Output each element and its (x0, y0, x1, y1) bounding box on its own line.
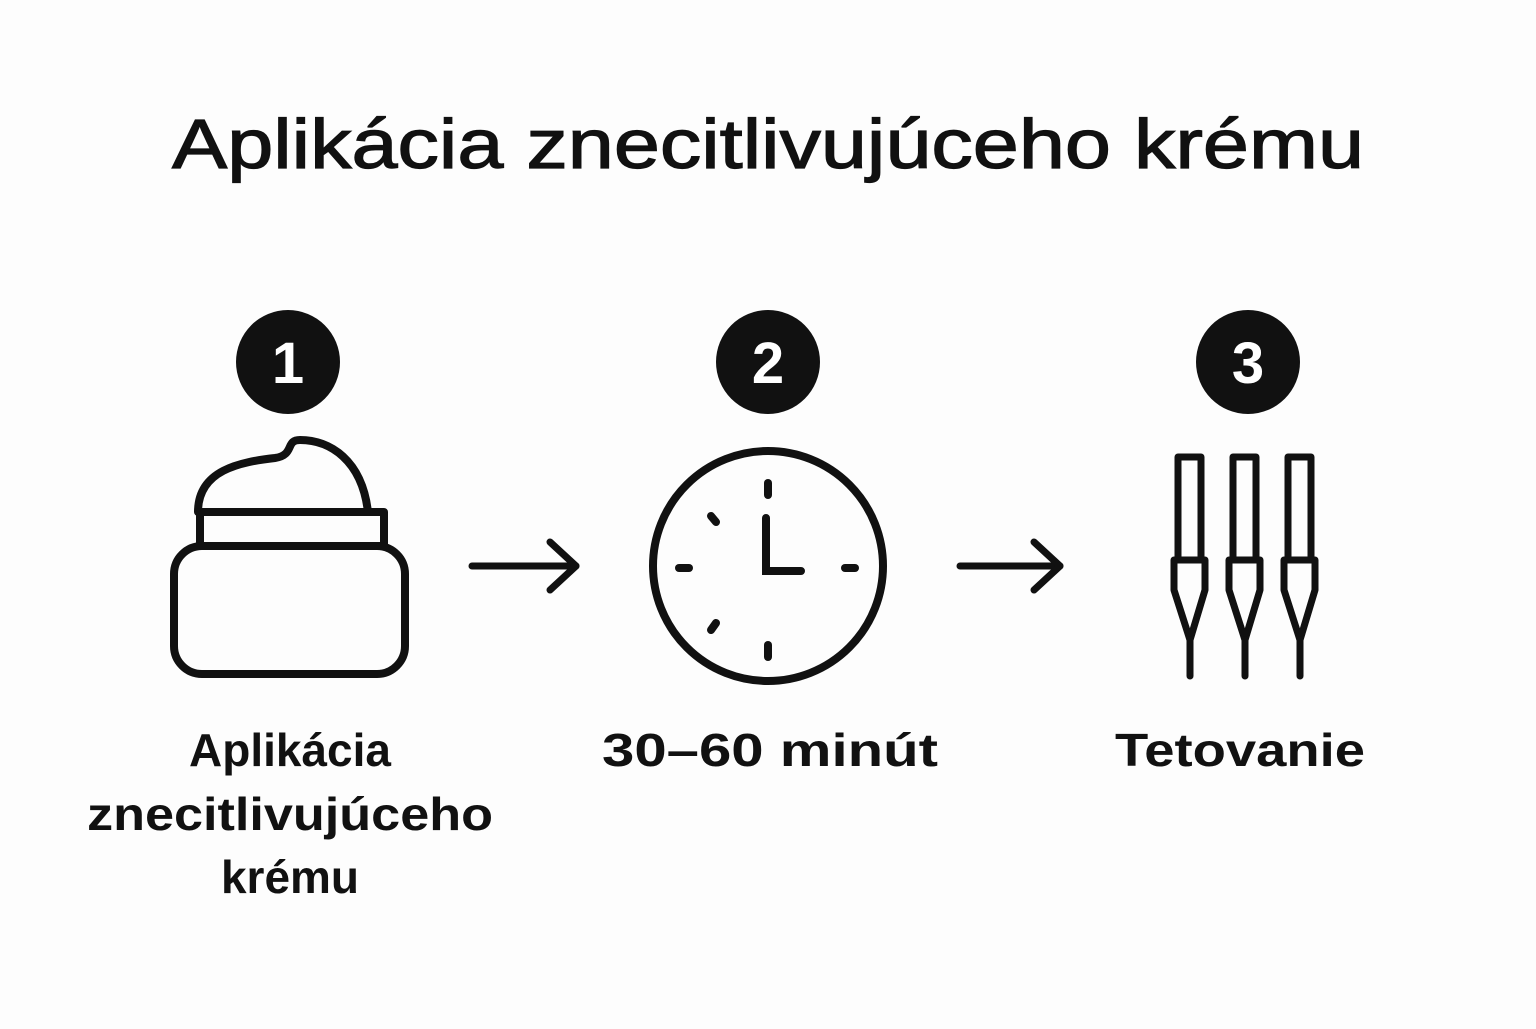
label step 3: Tetovanie (1115, 724, 1365, 776)
arrow 1 (472, 542, 576, 590)
title: Aplikácia znecitlivujúceho krému (172, 105, 1364, 183)
step 2 badge (716, 310, 820, 414)
label step 1: znecitlivujúceho (87, 788, 493, 840)
label step 1: Aplikácia (189, 724, 391, 776)
step 1 badge: 1 (272, 331, 304, 396)
icon: tattoo needles (1174, 457, 1315, 676)
arrow 2 (960, 542, 1060, 590)
label step 2: 30–60 minút (602, 724, 938, 776)
icon: cream jar (174, 440, 405, 674)
step 2 badge: 2 (752, 331, 784, 396)
label step 1 (87, 724, 493, 903)
step 3 badge: 3 (1232, 331, 1264, 396)
icon: clock (653, 451, 883, 681)
label step 1: krému (221, 851, 359, 903)
step 3 badge (1196, 310, 1300, 414)
step 1 badge (236, 310, 340, 414)
